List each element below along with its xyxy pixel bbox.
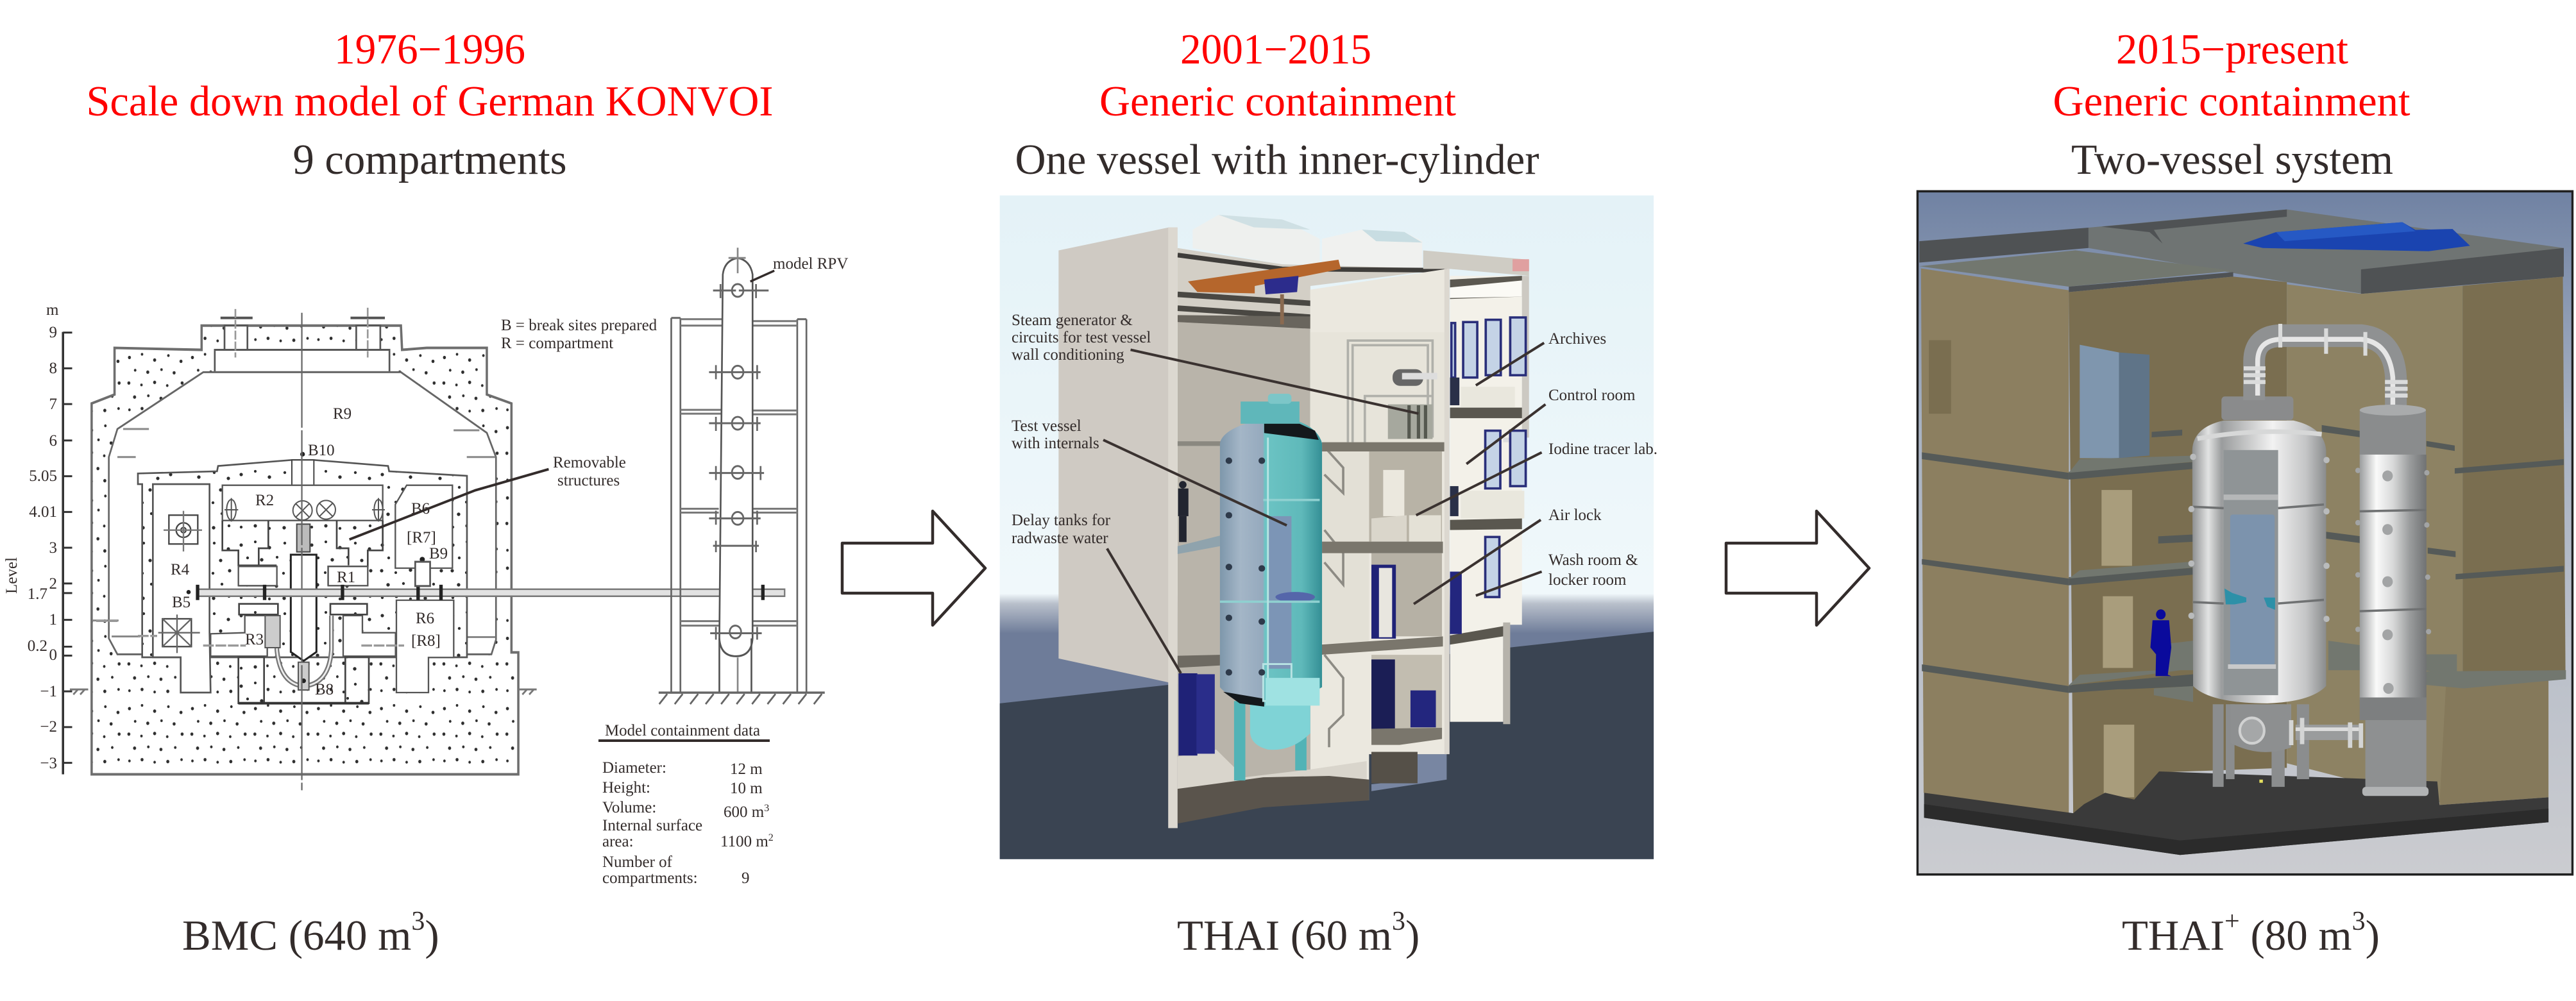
- axis labels: −2: [40, 718, 57, 736]
- centre floor slabs: [1321, 442, 1445, 745]
- caption: THAI: 3: [1392, 907, 1405, 936]
- vessel dark head bands: [1223, 420, 1319, 707]
- left outer wall face: [1058, 228, 1169, 682]
- heading: BMC period: 1976−1996: [334, 26, 525, 73]
- compartment labels: R6: [416, 610, 434, 627]
- THAI callout labels: wall conditioning: [1012, 346, 1124, 364]
- heading: BMC period: [86, 26, 774, 183]
- heading: THAI period: One vessel with inner-cylinder: [1015, 136, 1539, 183]
- heading: BMC period: 9 compartments: [292, 136, 567, 183]
- leader: model RPV: [750, 271, 774, 282]
- compartment labels: [R7]: [407, 529, 436, 546]
- panel: THAI building cutaway: [1000, 196, 1654, 859]
- compartment labels: R1: [337, 569, 355, 586]
- vessel bottom nozzle: [298, 662, 309, 690]
- compartment labels: R3: [245, 631, 264, 648]
- valves in R2: [225, 498, 385, 521]
- ceiling and rails: [1178, 248, 1446, 329]
- compartment labels: [R8]: [411, 632, 441, 650]
- inner structure concrete: [138, 460, 467, 657]
- THAI callout labels: Steam generator &: [1012, 312, 1133, 329]
- inner teal fittings: [2224, 589, 2275, 610]
- second vessel: [2360, 405, 2428, 796]
- lower room and tank: [1371, 655, 1442, 731]
- compartment labels: B9: [429, 545, 448, 562]
- caption: BMC: ): [425, 912, 439, 959]
- table: model containment data: 9: [741, 870, 749, 887]
- heading: BMC period: Scale down model of German KONVOI: [86, 78, 774, 125]
- cavity wall ticks: [93, 429, 495, 637]
- axis labels: 3: [49, 539, 57, 557]
- THAI callout labels: Delay tanks for: [1012, 512, 1111, 529]
- vessel cutaway: [2224, 450, 2278, 695]
- THAI callout labels: circuits for test vessel: [1012, 329, 1151, 346]
- compartment labels: [171, 405, 448, 698]
- THAI callout labels: with internals: [1012, 435, 1099, 452]
- central shaft plug: [292, 460, 314, 485]
- table: model containment data: Height:: [602, 779, 650, 796]
- compartment labels: R9: [333, 405, 352, 423]
- left wall cut edge: [1168, 228, 1178, 828]
- THAI callout labels: locker room: [1548, 571, 1627, 589]
- side rooms: [210, 566, 396, 656]
- room R7: [395, 485, 452, 568]
- small marker: [2259, 780, 2263, 783]
- table: model containment data: 3: [764, 803, 769, 814]
- floor slab line: [239, 700, 369, 707]
- axis labels: 8: [49, 360, 57, 377]
- ground-floor slab: [1178, 750, 1367, 790]
- axis labels: 1: [49, 611, 57, 628]
- vessel legs: [1234, 701, 1307, 780]
- lower right wall: [2439, 679, 2548, 805]
- caption: BMC: 3: [411, 907, 425, 936]
- roof: [1919, 210, 2564, 294]
- vessel ports: [1226, 457, 1265, 676]
- THAI callout labels: Archives: [1548, 330, 1606, 348]
- table: model containment data: 600 m: [724, 803, 764, 821]
- reactor vessel model: [291, 555, 316, 661]
- heading: THAI period: 2001−2015: [1180, 26, 1371, 73]
- axis labels: 0.2: [28, 637, 47, 655]
- centre building block: [1310, 269, 1446, 800]
- axis labels: 2: [49, 575, 57, 593]
- caption: THAI+: 3: [2352, 907, 2366, 936]
- ground marks: [70, 689, 537, 694]
- leader: removable structures: [350, 469, 548, 539]
- vessel side bolts: [2189, 453, 2330, 622]
- THAI callout labels: Iodine tracer lab.: [1548, 441, 1657, 458]
- vessel bottom head: [2230, 704, 2291, 752]
- table: model containment data: 10 m: [730, 780, 763, 797]
- test vessel body: [1220, 419, 1322, 705]
- panel: THAI+ two-vessel building: [1917, 191, 2572, 875]
- heading: THAI period: Generic containment: [1099, 78, 1456, 125]
- callout: model RPV: model RPV: [773, 255, 848, 273]
- compartment labels: R4: [171, 561, 190, 578]
- THAI callout labels: Control room: [1548, 387, 1636, 404]
- axis labels: 9: [49, 324, 57, 341]
- background: [1917, 191, 2572, 875]
- horizontal pipe to model RPV: [198, 562, 784, 600]
- air lock room: [1371, 553, 1442, 639]
- heading: THAI+ period: 2015−present: [2116, 26, 2348, 73]
- arrow: THAI to THAI+: [1726, 511, 1869, 625]
- table: model containment data: 2: [768, 832, 774, 843]
- model RPV nozzles: [709, 284, 768, 639]
- R9 dome cavity: [109, 372, 496, 654]
- legend note: R = compartment: [501, 335, 613, 352]
- basement band: [1178, 776, 1369, 823]
- room R6: [396, 600, 453, 693]
- table: model containment data: Number of: [602, 854, 673, 871]
- table: model containment data: 1100 m: [720, 833, 768, 850]
- service box: [2080, 345, 2149, 458]
- table: model containment data: 12 m: [730, 761, 763, 778]
- caption: THAI: THAI (60 m: [1177, 912, 1392, 959]
- level axis: [63, 332, 72, 775]
- axis labels: 0: [49, 646, 57, 664]
- slab tops: [2069, 455, 2566, 702]
- main vessel body: [2192, 421, 2326, 703]
- human figure: [2150, 609, 2171, 676]
- frame: [1917, 191, 2572, 875]
- compartment labels: R2: [255, 492, 274, 509]
- callout: removable structures: structures: [557, 472, 620, 489]
- containment shell concrete: [92, 326, 518, 775]
- panel: BMC containment cross-section drawing: [3, 248, 848, 887]
- window recess: [1929, 341, 1951, 414]
- axis labels: 7: [49, 396, 57, 413]
- table: model containment data: area:: [602, 833, 634, 850]
- axis labels: −1: [40, 683, 57, 700]
- left interior wall: [2069, 276, 2287, 813]
- vessel top nozzle: [297, 524, 310, 552]
- centre line: [301, 313, 303, 790]
- floor hatch under model RPV: [659, 693, 825, 704]
- legend note: [501, 317, 657, 352]
- axis labels: 5.05: [29, 467, 57, 485]
- heading: THAI+ period: Two-vessel system: [2071, 136, 2393, 183]
- compartment labels: B10: [308, 442, 335, 459]
- room R4: [153, 484, 210, 693]
- base plinth: [1924, 771, 2548, 855]
- connecting block at R3: [265, 616, 280, 648]
- table: model containment data: [598, 722, 774, 887]
- THAI callout labels: Wash room &: [1548, 551, 1638, 569]
- table: model containment data: Diameter:: [602, 759, 666, 777]
- removable structure outlines: [223, 521, 383, 585]
- floor slabs: [1922, 425, 2564, 693]
- iodine lab room: [1369, 451, 1442, 542]
- compartment labels: B8: [315, 681, 334, 698]
- R4 top valve square: [164, 511, 202, 551]
- caption: BMC: BMC (640 m: [182, 912, 411, 959]
- delay tanks: [1178, 673, 1215, 755]
- left roof slab: [1919, 250, 2233, 292]
- small break-site dots: [187, 452, 425, 683]
- table: model containment data: Volume:: [602, 799, 656, 816]
- heading: THAI+ period: [2053, 26, 2411, 183]
- axis labels: 1.7: [28, 585, 47, 603]
- THAI callout labels: Air lock: [1548, 507, 1602, 524]
- axis labels: m: [46, 301, 59, 319]
- arrow: BMC to THAI: [842, 511, 985, 625]
- interior back wall: [1178, 248, 1367, 800]
- inner cylinder: [1220, 437, 1319, 705]
- stair zone: [1322, 447, 1369, 747]
- heading: THAI period: [1015, 26, 1539, 183]
- caption: THAI: ): [1405, 912, 1419, 959]
- model RPV support frame: [671, 318, 806, 693]
- compartment labels: B5: [172, 594, 191, 611]
- table: model containment data: Model containment data: [605, 722, 760, 739]
- THAI callout labels: Test vessel: [1012, 417, 1081, 435]
- top lid opening: [215, 308, 389, 372]
- compartment labels: B6: [411, 500, 430, 517]
- right interior wall: [2287, 284, 2462, 804]
- right wing rooms: [1423, 251, 1529, 754]
- lower connecting pipe: [2291, 718, 2361, 748]
- caption: THAI+: +: [2224, 907, 2240, 936]
- axis labels: 4.01: [29, 503, 57, 521]
- duct to opening bars: [96, 621, 404, 646]
- callout: removable structures: Removable: [553, 454, 626, 471]
- R4 bottom crossed square: [158, 614, 200, 653]
- inner cylinder: [2224, 494, 2278, 669]
- THAI callout labels: [1012, 312, 1657, 589]
- transfer pipe: [2244, 324, 2408, 409]
- model RPV column: [719, 248, 752, 693]
- right wing desks and slabs: [1450, 378, 1524, 644]
- left outer wall: [1921, 269, 2069, 814]
- THAI callout labels: radwaste water: [1012, 530, 1108, 547]
- vessel weld rings: [2193, 505, 2324, 603]
- table: model containment data: Internal surface: [602, 817, 702, 834]
- overhead crane: [1188, 260, 1341, 324]
- vessel legs: [2213, 704, 2309, 787]
- vessel top head: [1241, 394, 1300, 424]
- legend note: B = break sites prepared: [501, 317, 657, 334]
- roof skylights: [1192, 215, 1422, 271]
- axis labels: Level: [3, 557, 21, 594]
- caption: THAI+: THAI: [2122, 912, 2224, 959]
- vessel bottom bowl: [1250, 703, 1310, 750]
- windows: [1452, 317, 1526, 597]
- person: [1178, 481, 1189, 542]
- upper equipment room: [1310, 332, 1445, 442]
- left floors: [1178, 441, 1221, 668]
- axis labels: −3: [40, 755, 57, 772]
- callout: removable structures: [553, 454, 626, 489]
- ground: [1000, 632, 1654, 859]
- axis labels: 6: [49, 432, 57, 450]
- basement pit: [1371, 752, 1418, 784]
- axis labels: [3, 301, 59, 772]
- blue skylights: [2243, 222, 2470, 251]
- heading: THAI+ period: Generic containment: [2053, 78, 2411, 125]
- table: model containment data: compartments:: [602, 870, 698, 887]
- lower U-shaped duct: [277, 616, 332, 686]
- room R2: [223, 485, 383, 521]
- second vessel ports: [2355, 467, 2431, 694]
- door openings: [2101, 490, 2134, 797]
- vessel top flange: [2198, 396, 2322, 439]
- caption: THAI+: (80 m: [2240, 912, 2352, 959]
- stippled pipe supports: [239, 604, 369, 703]
- under-building shade: [1371, 754, 1446, 791]
- leader lines: [1103, 343, 1545, 673]
- caption: THAI+: ): [2366, 912, 2380, 959]
- right outer wall: [2462, 276, 2566, 686]
- sky background: [1000, 196, 1654, 859]
